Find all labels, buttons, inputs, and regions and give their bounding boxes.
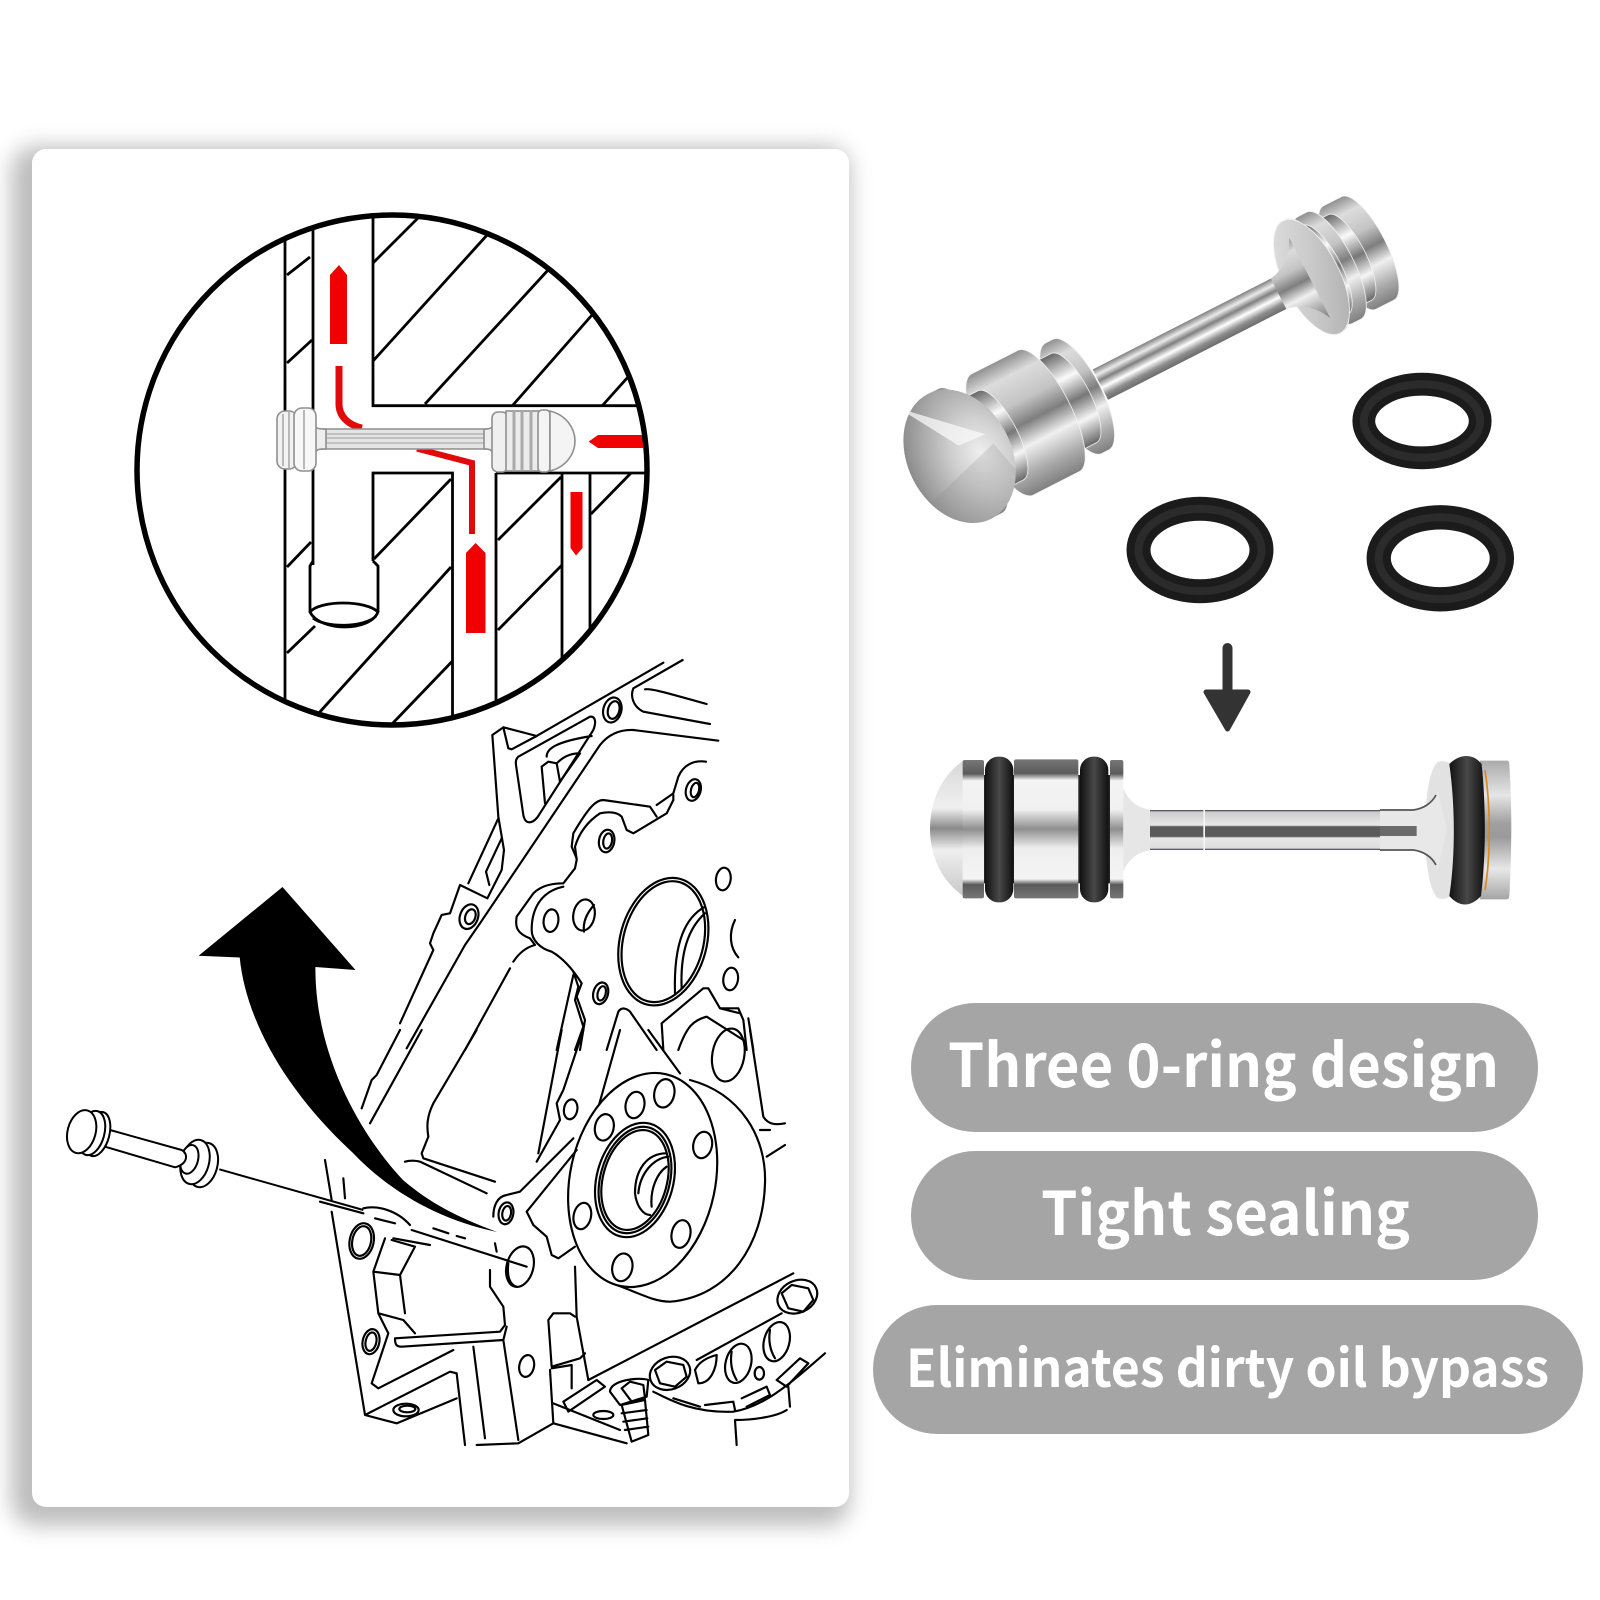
feature pill: Three 0-ring design: Three 0-ring design [948,1018,1499,1105]
icon: O-ring right [1379,517,1502,599]
red oil flow arrows [330,265,643,633]
icon: O-ring top right [1364,384,1480,458]
product: bypass pin angled view [903,196,1400,523]
drain bore [310,561,378,627]
feature pill: Eliminates dirty oil bypass: Eliminates dirty oil bypass [906,1327,1549,1402]
passage walls and hatching [284,218,644,722]
icon: removed bypass pin with guide line [62,1107,363,1210]
product: assembled pin with O-rings [930,756,1511,904]
flange bolts and plugs [593,1273,825,1445]
arrow: assembly down arrow [1206,648,1248,729]
feature pill: Three 0-ring design [911,1003,1538,1132]
crankshaft hub [549,1059,765,1302]
panel: installation diagram card [32,149,849,1507]
feature pill: Tight sealing: Tight sealing [1041,1166,1410,1253]
diagram: oil passage cross-section circle [137,200,660,740]
feature pill: Eliminates dirty oil bypass [873,1305,1583,1434]
icon: O-ring left [1138,509,1262,591]
arrow: black curved removal arrow [199,887,497,1232]
illustration: engine front cover, lower section with hub and bolts [320,1026,825,1445]
illustration: engine front cover, upper section [400,660,753,1050]
feature pill: Tight sealing [911,1151,1538,1280]
right flange, O-ring and end disc [1380,756,1511,904]
translucent bypass pin [277,408,575,472]
